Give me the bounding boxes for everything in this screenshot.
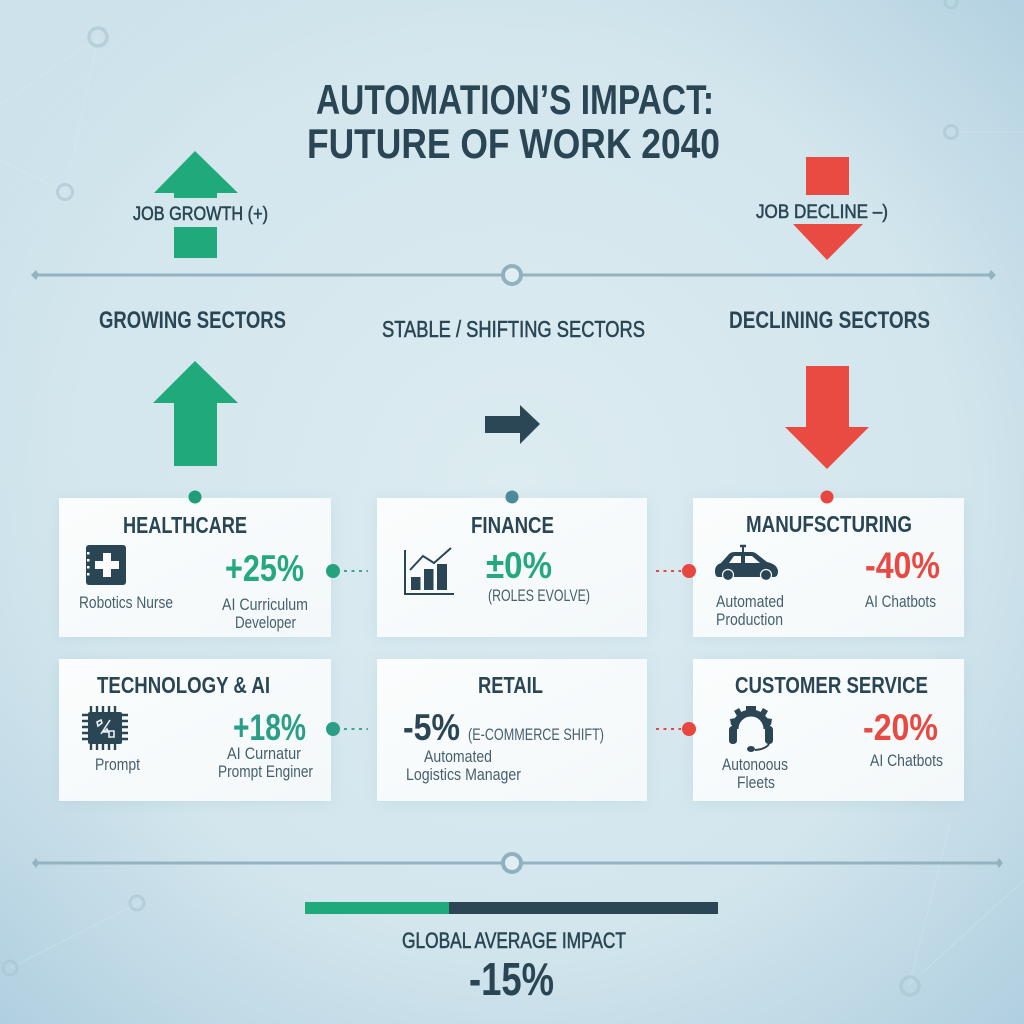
legend: job growth <box>133 151 268 258</box>
panel: finance <box>377 498 647 637</box>
arrow: declining <box>785 366 869 469</box>
top timeline divider <box>31 266 996 284</box>
panel: manufacturing <box>693 498 964 637</box>
connector: healthcare to finance <box>326 564 368 578</box>
title: AUTOMATION’S IMPACT: <box>316 76 714 123</box>
job: AI curriculum developer <box>222 595 308 632</box>
node: declining column <box>820 490 834 504</box>
job: robotics nurse: Robotics Nurse <box>79 593 173 612</box>
job: AI curnatur prompt enginer <box>218 744 313 781</box>
icon: green up arrow <box>154 151 238 258</box>
legend: job decline <box>756 157 888 260</box>
note: roles evolve: (ROLES EVOLVE) <box>488 586 590 605</box>
heading: healthcare: HEALTHCARE <box>123 512 247 538</box>
heading: technology and AI: TECHNOLOGY & AI <box>97 672 270 698</box>
job: automated production: Automated <box>716 592 784 611</box>
stat: -20%: -20% <box>863 707 938 748</box>
legend label: job growth: JOB GROWTH (+) <box>133 204 268 225</box>
stat: -5%: -5% <box>403 707 460 748</box>
arrow: stable <box>485 405 540 444</box>
connector: finance to manufacturing <box>656 564 696 578</box>
job: automated logistics manager: Automated <box>424 747 492 766</box>
job: autonoous fleets: Autonoous <box>722 755 788 774</box>
job: automated logistics manager: Logistics Manager <box>406 765 521 784</box>
title: FUTURE OF WORK 2040 <box>307 120 720 167</box>
icon: microchip <box>82 706 128 750</box>
node: growing column <box>188 490 202 504</box>
heading: stable and shifting sectors: STABLE / SHIFTING SECTORS <box>382 316 645 342</box>
heading: customer service: CUSTOMER SERVICE <box>735 672 928 698</box>
icon: autonomous car <box>715 546 778 580</box>
job: automated production: Production <box>716 610 783 629</box>
panel: healthcare <box>59 498 331 637</box>
job: automated logistics manager <box>406 747 521 784</box>
connector: technology to retail <box>326 722 368 736</box>
stat: +18%: +18% <box>233 707 306 748</box>
icon: growth chart <box>405 548 454 594</box>
job: autonoous fleets: Fleets <box>737 773 775 792</box>
heading: retail: RETAIL <box>478 672 543 698</box>
job: AI chatbots: AI Chatbots <box>870 751 943 770</box>
heading: finance: FINANCE <box>471 512 554 538</box>
job: AI curriculum developer: AI Curriculum <box>222 595 308 614</box>
panel: customer service <box>693 659 964 801</box>
panel: retail <box>377 659 647 801</box>
label: global average impact: GLOBAL AVERAGE IMPACT <box>402 928 626 953</box>
icon: medical notebook <box>86 545 126 585</box>
legend label: job decline: JOB DECLINE –) <box>756 202 888 223</box>
heading: declining sectors: DECLINING SECTORS <box>729 307 930 334</box>
job: prompt: Prompt <box>95 755 140 774</box>
arrow: growing <box>153 361 238 466</box>
heading: growing sectors: GROWING SECTORS <box>99 307 286 334</box>
job: AI curriculum developer: Developer <box>235 613 296 632</box>
title <box>307 76 720 167</box>
stat: plus or minus 0%: ±0% <box>486 545 552 586</box>
heading: manufacturing: MANUFSCTURING <box>746 511 912 537</box>
connector: retail to customer service <box>656 722 696 736</box>
icon: red down arrow <box>793 157 863 260</box>
job: automated production <box>716 592 784 629</box>
bottom timeline divider <box>32 854 1003 872</box>
icon: headset with gear <box>729 706 773 752</box>
stat: global -15%: -15% <box>469 953 554 1005</box>
note: e-commerce shift: (E-COMMERCE SHIFT) <box>468 725 604 744</box>
stat: +25%: +25% <box>225 548 304 589</box>
job: AI chatbots: AI Chatbots <box>865 592 936 611</box>
job: autonoous fleets <box>722 755 788 792</box>
global impact bar <box>305 902 718 914</box>
job: AI curnatur prompt enginer: Prompt Enginer <box>218 762 313 781</box>
panel: technology and AI <box>59 659 331 801</box>
job: AI curnatur prompt enginer: AI Curnatur <box>227 744 301 763</box>
stat: -40%: -40% <box>865 545 940 586</box>
node: stable column <box>506 490 518 504</box>
